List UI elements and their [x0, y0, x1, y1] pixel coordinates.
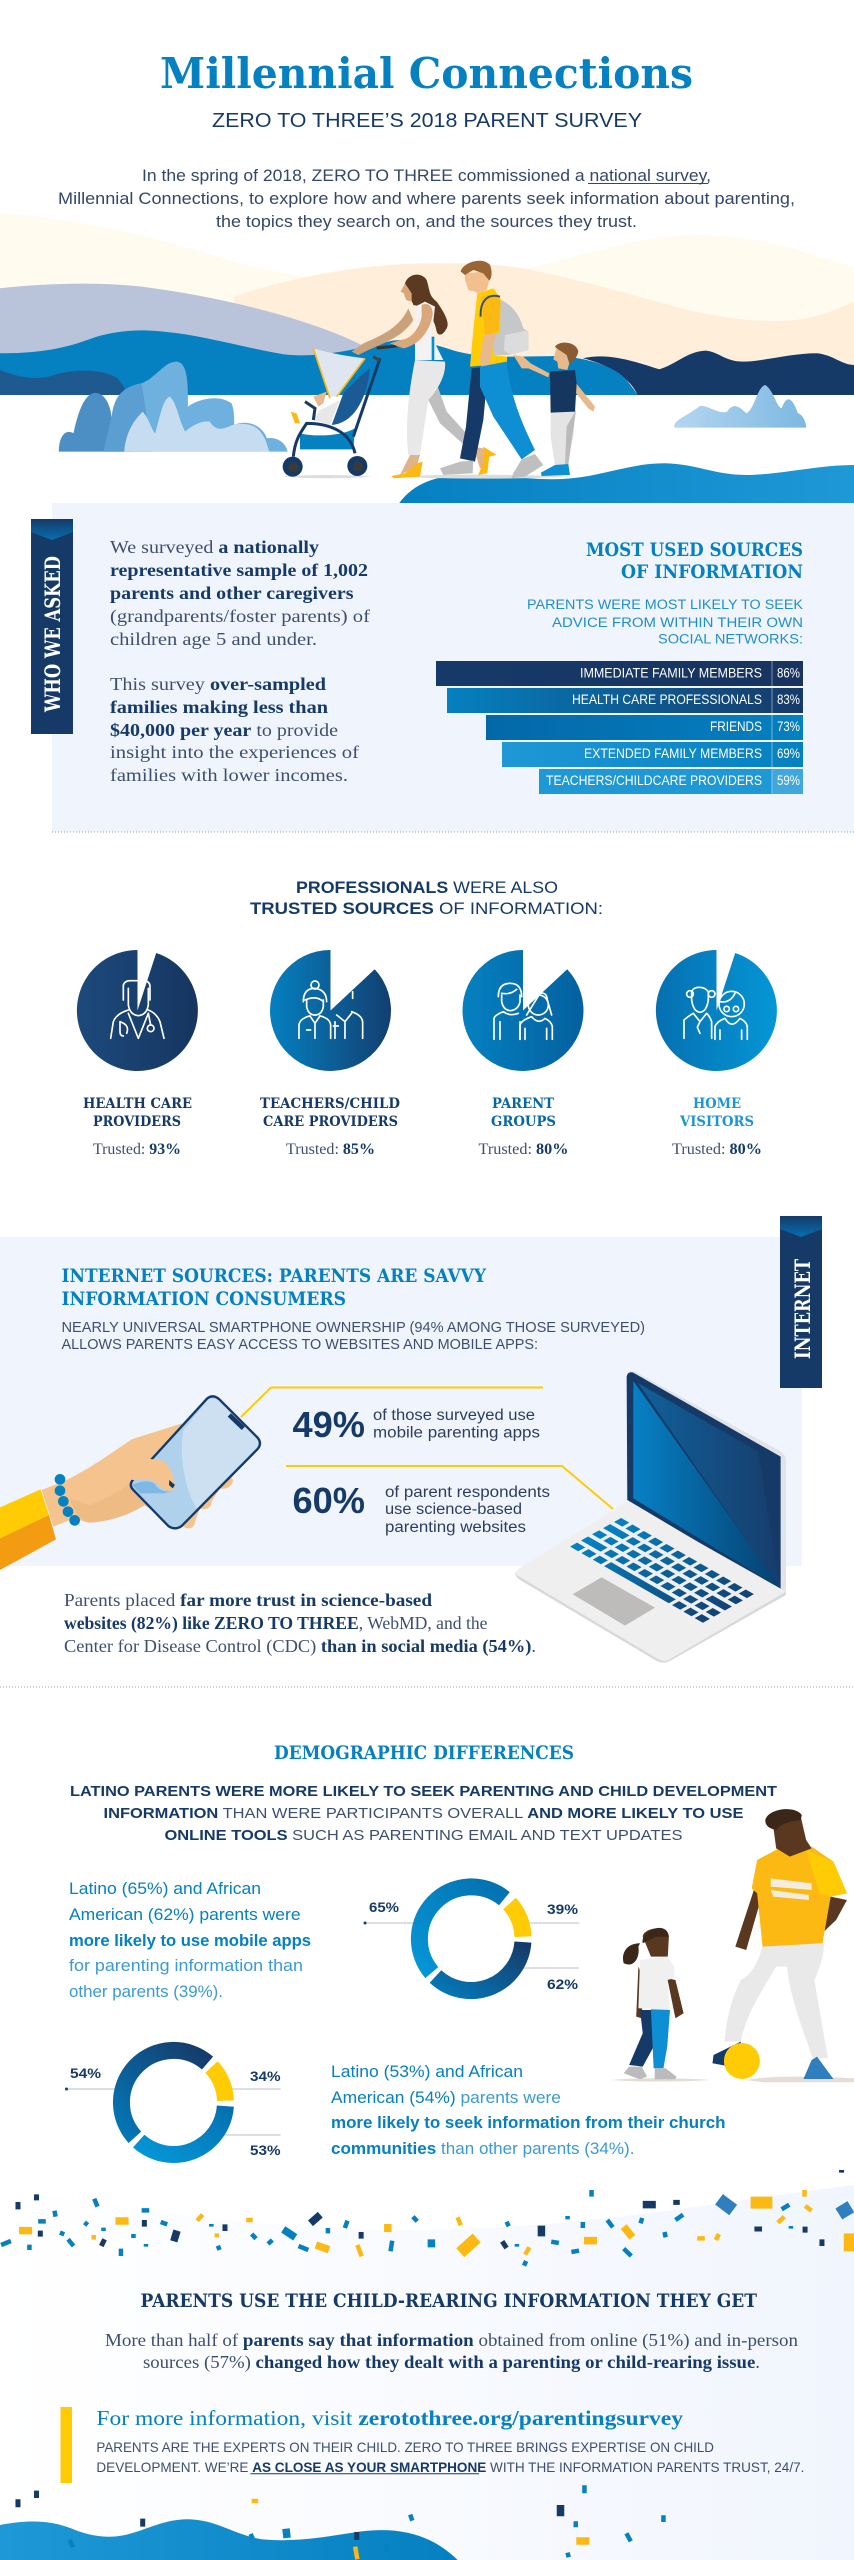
text: survey sample: This survey over-sampled — [110, 674, 326, 694]
paragraph: changed how they dealt: More than half of parents say that information obtained from online (51%) and in-person — [105, 2330, 798, 2351]
ground wave — [399, 463, 854, 503]
text: mobile apps: more likely to use mobile apps — [69, 1932, 311, 1950]
text: survey sample: We surveyed a nationally — [110, 537, 319, 557]
heading: internet sources: INTERNET SOURCES: PARENTS ARE SAVVY — [62, 1266, 487, 1287]
heading: internet sources — [62, 1266, 487, 1310]
man — [712, 1809, 847, 2079]
text: church communities: more likely to seek information from their church — [331, 2114, 726, 2132]
title: Millennial Connections — [160, 49, 693, 98]
chart labels: 62% — [547, 1976, 579, 1992]
subheading: latino parents — [70, 1783, 777, 1844]
text: survey sample: $40,000 per year to provide — [110, 720, 338, 740]
icon: teachers — [299, 981, 363, 1038]
subheading: latino parents: ONLINE TOOLS SUCH AS PARENTING EMAIL AND TEXT UPDATES — [164, 1827, 682, 1844]
text: mobile apps — [69, 1880, 311, 2001]
paragraph: changed how they dealt — [105, 2330, 798, 2373]
bar chart: sources: EXTENDED FAMILY MEMBERS — [584, 746, 762, 761]
ball — [724, 2043, 760, 2079]
text: survey sample: families with lower incomes. — [110, 765, 348, 785]
label: Trusted: 85% — [286, 1141, 375, 1158]
pie: home visitors — [656, 950, 777, 1158]
text: survey sample: children age 5 and under. — [110, 629, 317, 649]
callout: more information — [60, 2406, 804, 2483]
text: trust in science-based websites — [64, 1590, 536, 1657]
icon: home visitors — [684, 987, 747, 1039]
stat: 49 percent: of those surveyed use — [373, 1407, 535, 1424]
stat: 60 percent: parenting websites — [385, 1519, 526, 1536]
donut chart: church communities — [65, 2050, 281, 2158]
bar chart: sources: FRIENDS — [710, 719, 762, 734]
stroller — [283, 346, 397, 477]
subheading: smartphone ownership: ALLOWS PARENTS EASY ACCESS TO WEBSITES AND MOBILE APPS: — [62, 1336, 538, 1353]
text: survey sample: parents and other caregivers — [110, 583, 354, 603]
subheading: latino parents: INFORMATION THAN WERE PARTICIPANTS OVERALL AND MORE LIKELY TO USE — [104, 1805, 743, 1822]
icon: parents — [494, 983, 552, 1039]
heading: professionals: PROFESSIONALS WERE ALSO — [296, 879, 558, 897]
label: PROVIDERS — [93, 1114, 181, 1130]
mother — [352, 275, 497, 478]
text: church communities: communities than other parents (34%). — [331, 2140, 634, 2158]
text: church communities: American (54%) parents were — [331, 2089, 561, 2107]
stat: 49 percent: mobile parenting apps — [373, 1424, 540, 1442]
text: trust in science-based websites: Center for Disease Control (CDC) than in social media (54%). — [64, 1636, 536, 1657]
label: CARE PROVIDERS — [263, 1114, 398, 1130]
donut chart: mobile apps — [364, 1887, 579, 1992]
label: TEACHERS/CHILD — [260, 1096, 400, 1112]
label: GROUPS — [491, 1114, 556, 1130]
text: trust in science-based websites: websites (82%) like ZERO TO THREE, WebMD, and the — [64, 1613, 488, 1634]
illustration: man and girl with ball — [611, 1809, 854, 2082]
chart labels — [369, 1899, 579, 1992]
text: survey sample: (grandparents/foster parents) of — [110, 606, 370, 627]
label — [672, 1096, 762, 1158]
panel: internet sources — [0, 1216, 822, 1570]
bush left — [59, 362, 288, 452]
bar chart: sources — [436, 661, 803, 794]
subheading: smartphone ownership — [62, 1319, 645, 1353]
subheading: smartphone ownership: NEARLY UNIVERSAL SMARTPHONE OWNERSHIP (94% AMONG THOSE SURVEYED) — [62, 1319, 645, 1336]
stat: 49 percent — [292, 1404, 540, 1445]
stat: 60 percent — [292, 1480, 550, 1536]
callout: more information: DEVELOPMENT. WE’RE AS CLOSE AS YOUR SMARTPHONE WITH THE INFORMATION PARENTS TRUST, 24/7. — [96, 2459, 804, 2475]
bar chart: sources: 59% — [777, 773, 800, 788]
intro paragraph: the topics they search on, and the sources they trust. — [216, 213, 637, 231]
panel: parents use the information — [0, 2170, 854, 2560]
hero illustration: landscape and family — [0, 213, 854, 503]
subheading: latino parents: LATINO PARENTS WERE MORE LIKELY TO SEEK PARENTING AND CHILD DEVELOPMENT — [70, 1783, 777, 1800]
heading: parents use information: PARENTS USE THE CHILD-REARING INFORMATION THEY GET — [140, 2291, 757, 2312]
intro paragraph: Millennial Connections, to explore how and where parents seek information about parenting, — [58, 190, 795, 208]
bar chart: sources: IMMEDIATE FAMILY MEMBERS — [580, 666, 762, 680]
label: HOME — [693, 1096, 741, 1112]
stat: 49 percent: 49% — [292, 1404, 365, 1445]
label — [260, 1096, 400, 1158]
pie: teachers and child care providers — [260, 950, 400, 1158]
heading: internet sources: INFORMATION CONSUMERS — [62, 1289, 346, 1310]
text: survey sample — [110, 537, 370, 785]
bar chart: sources: TEACHERS/CHILDCARE PROVIDERS — [546, 773, 762, 788]
heading: most used sources — [586, 539, 803, 583]
text: survey sample: insight into the experiences of — [110, 742, 359, 762]
paragraph: changed how they dealt: sources (57%) changed how they dealt with a parenting or child-rearing issue . — [143, 2352, 760, 2373]
text: mobile apps: American (62%) parents were — [69, 1906, 301, 1924]
callout: more information: For more information, visit zerotothree.org/parentingsurvey — [96, 2406, 684, 2430]
chart labels — [70, 2065, 281, 2158]
chart labels: 34% — [250, 2068, 281, 2084]
bar chart: sources: 86% — [777, 666, 800, 680]
bush right — [674, 385, 806, 428]
label: Trusted: 80% — [672, 1141, 762, 1158]
text: mobile apps: other parents (39%). — [69, 1983, 223, 2001]
confetti — [1, 2170, 851, 2559]
bar chart: sources: HEALTH CARE PROFESSIONALS — [572, 692, 762, 707]
landscape hills — [0, 213, 854, 395]
bar chart: sources: 73% — [777, 719, 800, 734]
pie: health care providers — [77, 950, 198, 1158]
stat: 60 percent: of parent respondents — [385, 1484, 550, 1501]
subheading: social networks: PARENTS WERE MOST LIKELY TO SEEK — [527, 597, 803, 612]
callout connectors — [241, 1388, 613, 1509]
text: mobile apps: Latino (65%) and African — [69, 1880, 261, 1898]
bar chart: sources: 69% — [777, 746, 800, 761]
callout: more information: PARENTS ARE THE EXPERTS ON THEIR CHILD. ZERO TO THREE BRINGS EXPERTISE ON CHILD — [96, 2439, 714, 2455]
stat: 60 percent: use science-based — [385, 1501, 522, 1518]
bottom wave — [0, 2519, 458, 2560]
ribbon: internet: INTERNET — [790, 1259, 815, 1359]
child — [513, 343, 595, 476]
text: church communities: Latino (53%) and African — [331, 2063, 523, 2081]
text: church communities — [331, 2063, 726, 2158]
family: mother, father, child, stroller — [280, 261, 595, 479]
text: trust in science-based websites: Parents placed far more trust in science-based — [64, 1590, 432, 1610]
label — [83, 1096, 192, 1158]
stat: 60 percent: 60% — [292, 1480, 365, 1521]
girl — [623, 1928, 684, 2079]
pie: parent groups — [462, 950, 583, 1158]
ribbon: who we asked: WHO WE ASKED — [40, 556, 65, 713]
father — [440, 261, 543, 478]
bar chart: sources: 83% — [777, 692, 800, 707]
label: PARENT — [492, 1096, 555, 1112]
chart labels: 53% — [250, 2142, 281, 2158]
subheading: social networks: ADVICE FROM WITHIN THEIR OWN — [552, 615, 803, 630]
heading: most used sources: OF INFORMATION — [621, 561, 803, 583]
label: Trusted: 93% — [93, 1141, 181, 1158]
subtitle: ZERO TO THREE’S 2018 PARENT SURVEY — [212, 109, 642, 132]
text: survey sample: families making less than — [110, 697, 328, 717]
text: mobile apps: for parenting information than — [69, 1957, 303, 1975]
heading: professionals: TRUSTED SOURCES OF INFORMATION: — [250, 900, 603, 918]
text: survey sample: representative sample of 1,002 — [110, 560, 368, 580]
subheading: social networks: SOCIAL NETWORKS: — [658, 632, 803, 646]
label: HEALTH CARE — [83, 1096, 192, 1112]
chart labels: 39% — [547, 1901, 579, 1917]
label: Trusted: 80% — [478, 1141, 568, 1158]
icon: doctor — [111, 981, 164, 1038]
intro paragraph — [58, 167, 795, 231]
chart labels: 65% — [369, 1899, 400, 1915]
intro paragraph: In the spring of 2018, ZERO TO THREE commissioned a national survey, — [142, 167, 711, 185]
ribbon: who we asked — [31, 519, 73, 734]
panel: who we asked — [31, 503, 854, 832]
label — [478, 1096, 568, 1158]
icon: laptop — [515, 1371, 786, 1663]
chart labels: 54% — [70, 2065, 102, 2081]
ribbon: internet — [780, 1216, 822, 1388]
heading: most used sources: MOST USED SOURCES — [586, 539, 803, 561]
heading: demographic differences: DEMOGRAPHIC DIFFERENCES — [274, 1743, 574, 1764]
label: VISITORS — [679, 1114, 754, 1130]
icon: hand holding phone — [0, 1396, 260, 1570]
subheading: social networks — [527, 597, 803, 646]
heading: professionals — [250, 879, 603, 918]
